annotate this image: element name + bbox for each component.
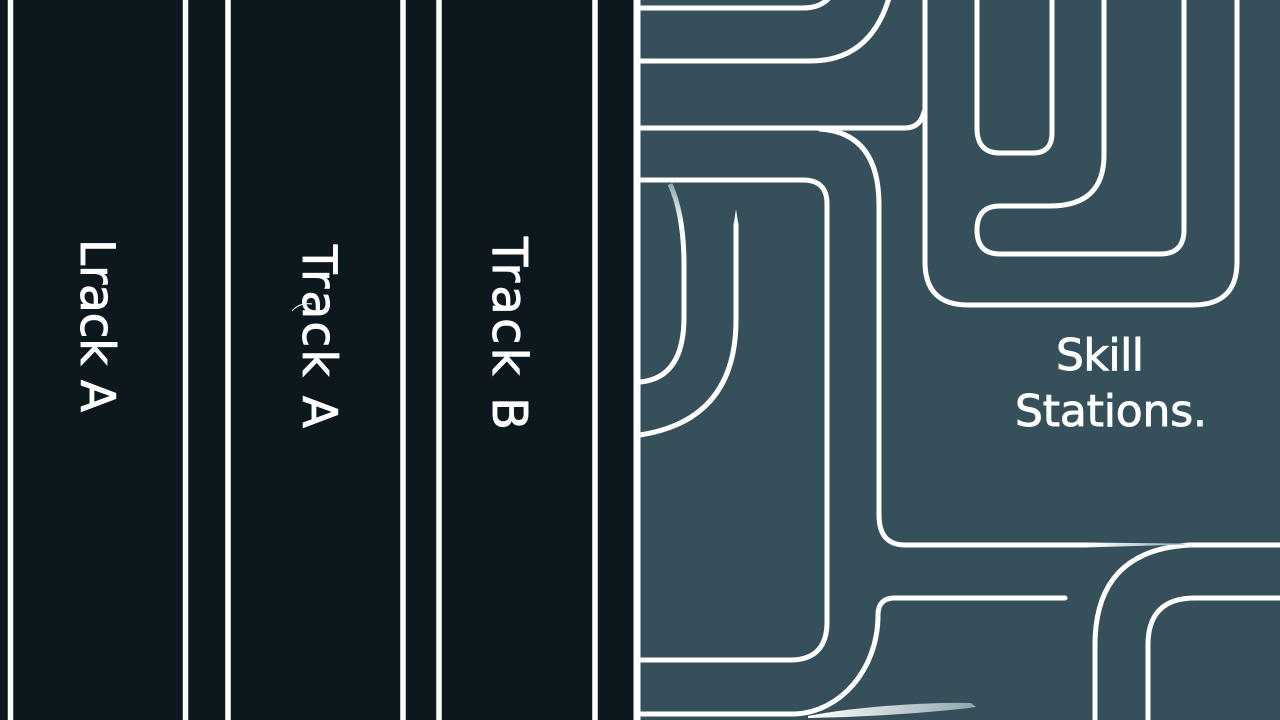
icon: swoosh streak — [808, 703, 976, 718]
panel: tracks background — [0, 0, 637, 720]
skill station paths — [640, 0, 1280, 720]
icon: small arc on second Track A label — [292, 304, 312, 311]
label: Track A second: Track A — [291, 244, 346, 428]
panel: skill stations background — [640, 0, 1280, 720]
heading: Skill Stations: Stations. — [1015, 386, 1207, 437]
track lines — [10, 0, 637, 720]
icon: tapered line tip — [734, 209, 738, 226]
label: Track B: Track B — [481, 236, 537, 430]
label: Track A first: Lrack A — [69, 239, 124, 412]
heading: Skill Stations — [1015, 330, 1207, 437]
heading: Skill Stations: Skill — [1056, 330, 1144, 381]
icon: fading line end — [1085, 542, 1185, 548]
